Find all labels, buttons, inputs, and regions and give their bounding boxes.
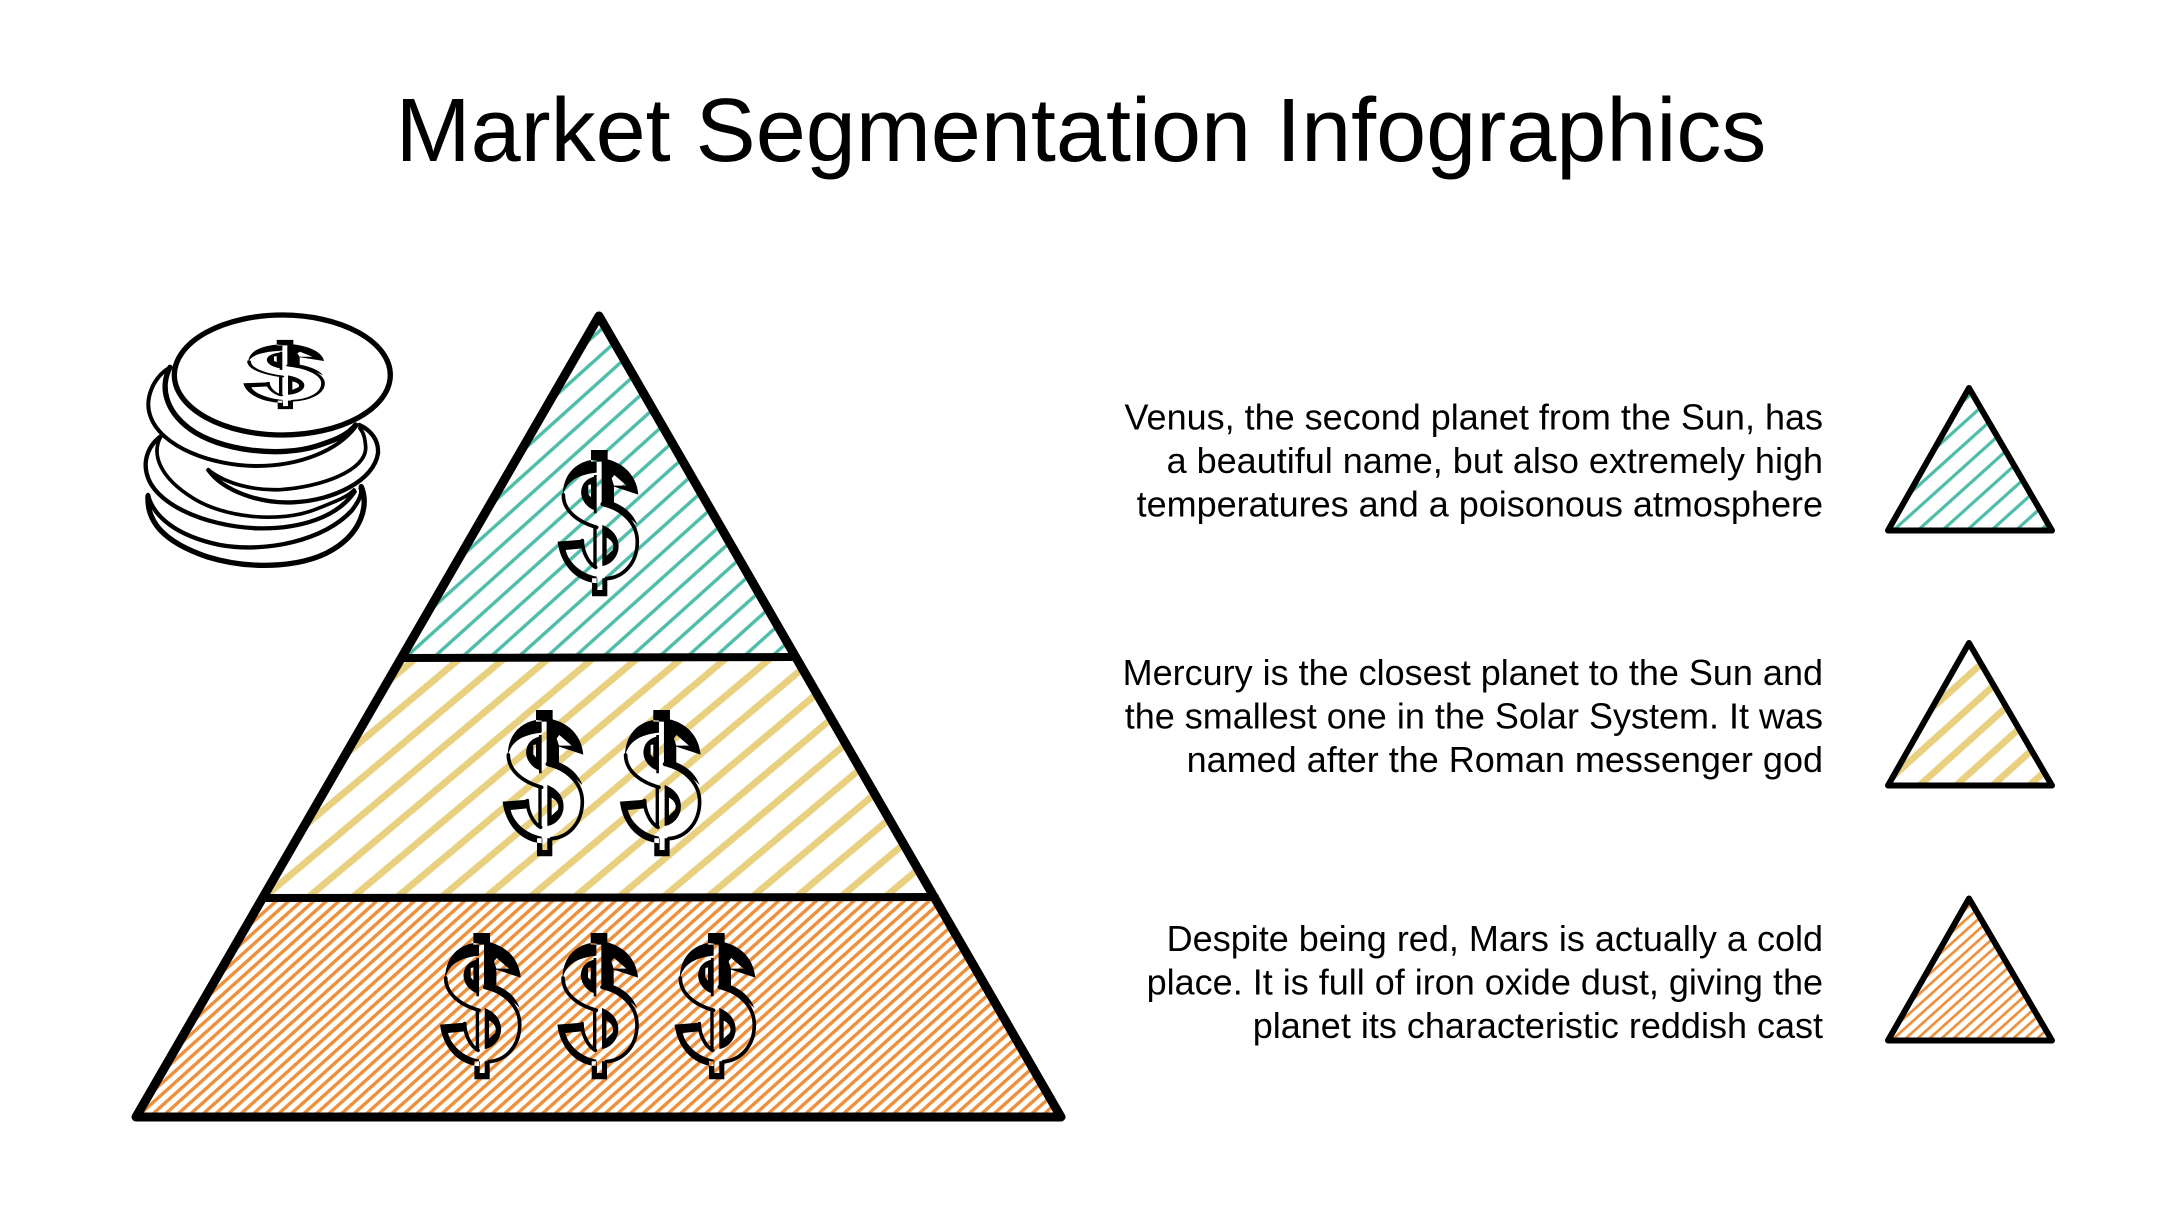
text block: Mercury: [1123, 652, 1823, 780]
icon: stack of coins: [146, 315, 390, 565]
text block: Mercury: Mercury is the closest planet to the Sun and: [1123, 652, 1823, 693]
text block: Venus: temperatures and a poisonous atmosphere: [1137, 484, 1823, 524]
title: Market Segmentation Infographics: [396, 81, 1766, 181]
text block: Mars: place. It is full of iron oxide dust, giving the: [1147, 962, 1823, 1002]
pyramid: three stacked segments: [136, 316, 1061, 1117]
text block: Mars: planet its characteristic reddish cast: [1253, 1005, 1823, 1046]
icon: dollar 2 in orange segment: [557, 933, 638, 1079]
segment: middle yellow: [263, 657, 935, 897]
pyramid outline and dividers: [136, 316, 1061, 1117]
legend triangle: yellow: [1888, 643, 2052, 786]
legend triangle: orange: [1888, 898, 2052, 1040]
text block: Mars: Despite being red, Mars is actually a cold: [1167, 918, 1823, 959]
text block: Venus: Venus, the second planet from the Sun, has: [1125, 396, 1823, 438]
segment: bottom orange: [136, 897, 1061, 1117]
legend triangle: teal: [1888, 388, 2052, 530]
text block: Mercury: named after the Roman messenger god: [1187, 739, 1823, 780]
icon: dollar in teal segment: [558, 450, 638, 596]
icon: dollar 1 in yellow segment: [503, 710, 583, 856]
text block: Mercury: the smallest one in the Solar System. It was: [1125, 696, 1823, 736]
icon: dollar 1 in orange segment: [440, 933, 521, 1079]
text block: Mars: [1147, 918, 1823, 1046]
icon: dollar 3 in orange segment: [675, 933, 755, 1079]
text block: Venus: [1125, 396, 1823, 524]
icon: dollar 2 in yellow segment: [620, 710, 701, 856]
text block: Venus: a beautiful name, but also extremely high: [1167, 440, 1823, 481]
segment: top teal: [401, 316, 797, 657]
icon: dollar on top coin: [243, 340, 324, 409]
